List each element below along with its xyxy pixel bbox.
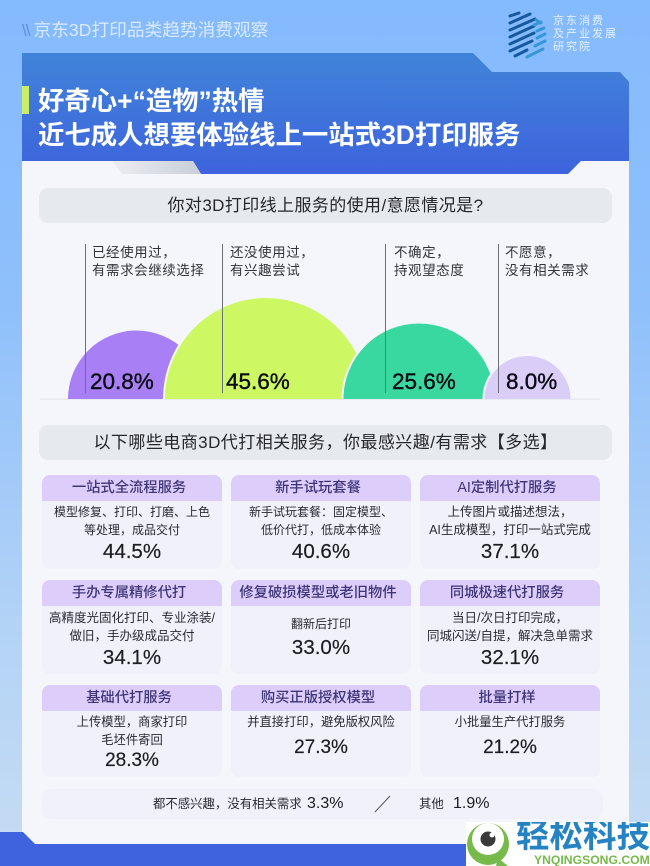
card: AI custom: AI定制代打服务 xyxy=(457,480,557,496)
label: used: 有需求会继续选择 xyxy=(92,263,204,278)
card: same-city xyxy=(420,580,600,674)
question 2 bar: 以下哪些电商3D代打相关服务，你最感兴趣/有需求【多选】 xyxy=(93,433,558,452)
label: unsure xyxy=(394,245,464,278)
card: same-city: 同城闪送/自提，解决急单需求 xyxy=(427,628,593,642)
card: beginner xyxy=(231,475,411,569)
card: figures: 手办专属精修代打 xyxy=(72,585,186,601)
logo text xyxy=(553,14,618,53)
card: basic: 28.3% xyxy=(105,750,159,771)
card: same-city: 同城极速代打服务 xyxy=(450,585,564,601)
logo text: 及产业发展 xyxy=(553,28,618,40)
card: batch: 批量打样 xyxy=(478,690,536,706)
label: used xyxy=(92,245,204,278)
card: repair: 33.0% xyxy=(292,636,350,659)
question 1 bar xyxy=(39,188,612,223)
value 25.6%: 25.6% xyxy=(392,369,456,394)
icon: eye logo xyxy=(467,823,509,866)
card: figures: 做旧，手办级成品交付 xyxy=(69,628,194,642)
card: one-stop: 一站式全流程服务 xyxy=(72,480,186,496)
card: AI custom xyxy=(420,475,600,569)
card: one-stop: 等处理，成品交付 xyxy=(84,522,180,536)
label: unsure: 持观望态度 xyxy=(394,263,464,278)
card: figures xyxy=(42,580,222,674)
card: basic: 基础代打服务 xyxy=(86,690,172,706)
card: AI custom: AI生成模型，打印一站式完成 xyxy=(429,522,591,536)
label: unsure: 不确定， xyxy=(394,245,450,260)
card: basic xyxy=(42,685,222,777)
card: licensed: 购买正版授权模型 xyxy=(261,690,375,706)
logo text: 京东消费 xyxy=(553,15,605,27)
semicircle chart xyxy=(40,244,600,400)
card: basic: 毛坯件寄回 xyxy=(101,732,163,746)
not interested: 都不感兴趣，没有相关需求 xyxy=(153,797,302,811)
question 2 bar xyxy=(39,425,612,460)
card: licensed xyxy=(231,685,411,777)
card: figures: 高精度光固化打印、专业涂装/ xyxy=(49,611,215,625)
card: repair: 翻新后打印 xyxy=(291,617,351,631)
label: unwilling xyxy=(505,245,589,278)
card: figures: 34.1% xyxy=(103,646,161,669)
card: beginner: 40.6% xyxy=(292,540,350,563)
card: one-stop: 模型修复、打印、打磨、上色 xyxy=(54,505,210,519)
label: interested: 还没使用过， xyxy=(230,245,314,260)
card: beginner: 新手试玩套餐：固定模型、 xyxy=(249,505,393,519)
value 20.8%: 20.8% xyxy=(90,369,154,394)
card: same-city: 32.1% xyxy=(481,646,539,669)
title: 好奇心+“造物”热情 xyxy=(38,86,265,116)
card: one-stop: 44.5% xyxy=(103,540,161,563)
card: one-stop xyxy=(42,475,222,569)
icon: institute logo xyxy=(508,12,546,59)
card: licensed: 27.3% xyxy=(294,737,348,758)
card: batch: 小批量生产代打服务 xyxy=(455,715,565,729)
label: unwilling: 没有相关需求 xyxy=(505,263,589,278)
label: unwilling: 不愿意， xyxy=(505,245,561,260)
divider slash xyxy=(374,796,390,812)
card: beginner: 新手试玩套餐 xyxy=(275,480,361,496)
top subtitle: \\京东3D打印品类趋势消费观察 xyxy=(22,20,268,40)
label: used: 已经使用过， xyxy=(92,245,176,260)
card: same-city: 当日/次日打印完成， xyxy=(452,611,568,625)
value 8.0%: 8.0% xyxy=(506,369,557,394)
value 3.3%: 3.3% xyxy=(307,795,343,812)
card: beginner: 低价代打，低成本体验 xyxy=(261,522,381,536)
label: interested: 有兴趣尝试 xyxy=(230,263,300,278)
card: repair xyxy=(231,580,411,674)
label: interested xyxy=(230,245,314,278)
card: batch xyxy=(420,685,600,777)
accent bar xyxy=(22,86,29,114)
card: AI custom: 37.1% xyxy=(481,540,539,563)
card: repair: 修复破损模型或老旧物件 xyxy=(239,585,397,601)
watermark xyxy=(466,822,650,866)
logo text: 研究院 xyxy=(553,41,592,53)
card: basic: 上传模型，商家打印 xyxy=(77,715,187,729)
card: batch: 21.2% xyxy=(483,737,537,758)
value 1.9%: 1.9% xyxy=(453,795,489,812)
footer stats bar xyxy=(42,789,603,819)
title xyxy=(38,86,520,150)
card: AI custom: 上传图片或描述想法， xyxy=(447,505,572,519)
question 1 bar: 你对3D打印线上服务的使用/意愿情况是? xyxy=(168,196,483,215)
value 45.6%: 45.6% xyxy=(226,369,290,394)
card: licensed: 并直接打印，避免版权风险 xyxy=(247,715,395,729)
title: 近七成人想要体验线上一站式3D打印服务 xyxy=(38,120,520,150)
other: 其他 xyxy=(419,797,444,811)
